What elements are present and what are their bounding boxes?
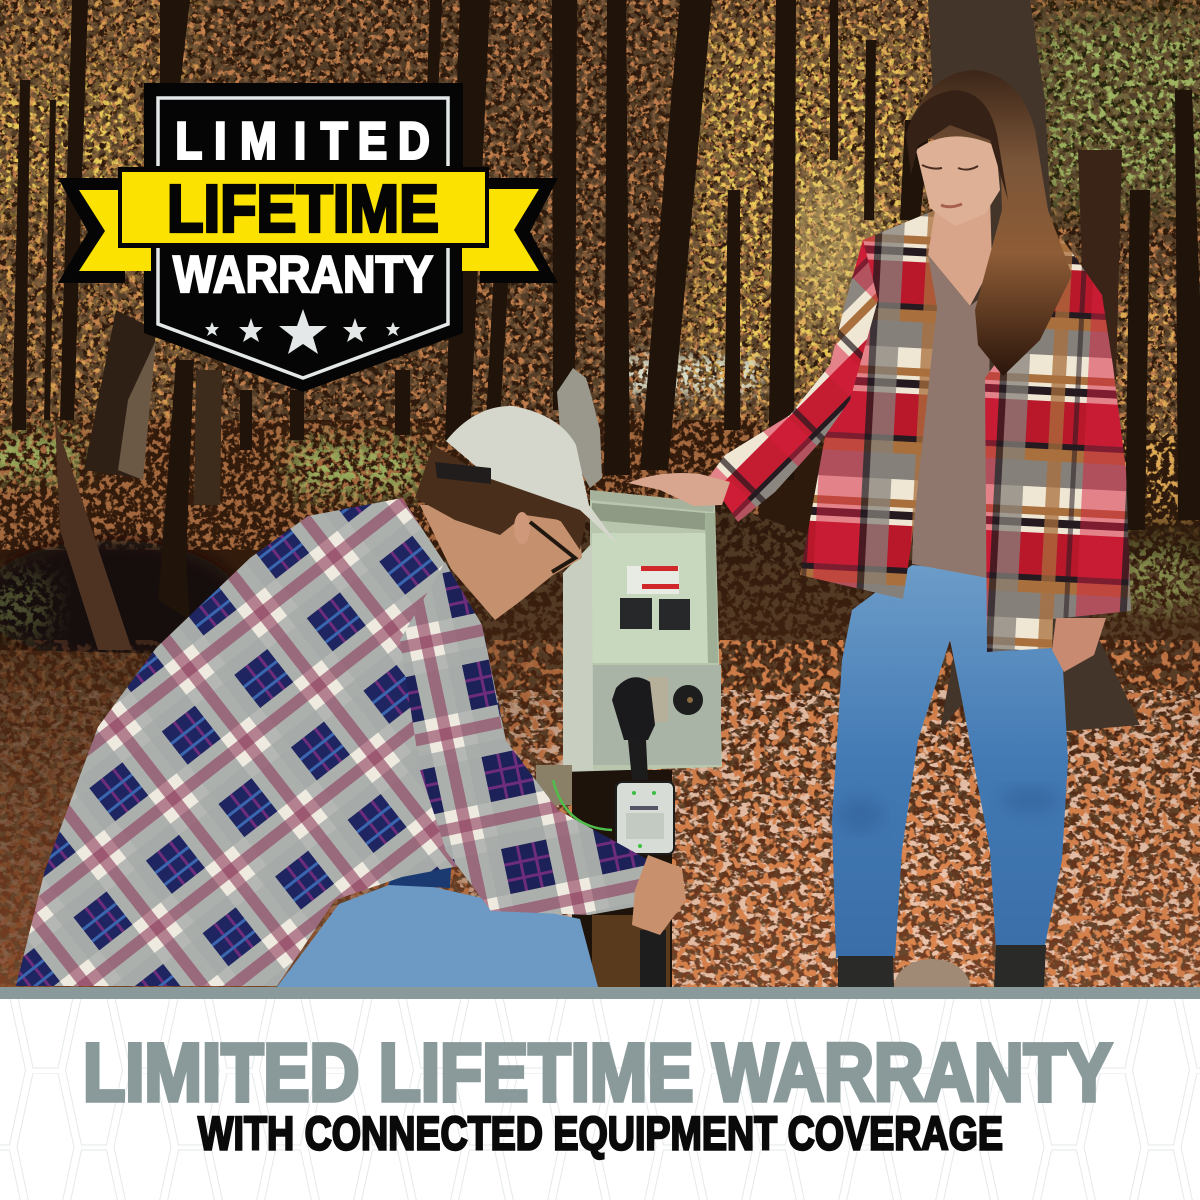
shirt torso — [16, 498, 510, 986]
cap — [446, 406, 618, 545]
dark jeans fold — [388, 820, 452, 888]
large tree behind woman — [928, 0, 1140, 735]
ribbon right tail — [462, 178, 558, 283]
shirt sleeve — [400, 562, 652, 915]
badge text: warranty: WARRANTY — [173, 246, 433, 304]
round outlet — [673, 685, 703, 715]
shield — [144, 83, 463, 392]
electrical panel — [563, 490, 722, 780]
ribbon left tail — [58, 178, 151, 283]
side wall — [563, 545, 593, 772]
shield inner outline — [158, 98, 448, 378]
pale bush — [610, 355, 760, 395]
clamp on post — [536, 765, 572, 805]
cord — [628, 740, 648, 780]
knee shading — [836, 786, 1060, 833]
manhole cover — [894, 959, 970, 1015]
hand — [632, 855, 686, 935]
hair front — [906, 90, 1008, 200]
badge stars — [205, 309, 400, 354]
stone statue — [557, 368, 602, 488]
panel shadow under lid — [592, 503, 705, 530]
badge text: limited: LIMITED — [176, 113, 430, 170]
plaid shirt body right — [985, 240, 1131, 652]
t-shirt — [912, 255, 990, 578]
face — [916, 136, 1000, 226]
ear — [514, 512, 530, 544]
cap strap — [435, 462, 491, 484]
surge protector device — [616, 782, 674, 854]
man — [16, 406, 686, 987]
hand on panel — [628, 473, 730, 506]
glasses — [530, 522, 575, 572]
power plug — [612, 677, 655, 740]
plaid sleeve — [708, 240, 878, 522]
breakers — [620, 598, 690, 630]
leaf litter — [0, 640, 1200, 987]
hair back — [906, 70, 1072, 376]
distant floor and undergrowth — [0, 420, 760, 660]
panel lid — [590, 490, 715, 512]
face features — [922, 165, 978, 207]
tree trunks — [12, 0, 1200, 620]
woman — [628, 70, 1131, 987]
neck — [928, 195, 992, 306]
footer band — [0, 987, 1200, 999]
lit trunks — [55, 310, 222, 650]
right wall — [705, 513, 718, 663]
wooden post base — [592, 915, 670, 987]
hair — [415, 445, 589, 550]
lower power cable — [640, 930, 666, 987]
footer subtitle: WITH CONNECTED EQUIPMENT COVERAGE — [198, 1106, 1003, 1160]
green ground wire — [553, 780, 612, 830]
jeans — [277, 880, 598, 987]
neck and face — [420, 505, 582, 620]
duplex outlet — [648, 677, 668, 722]
lower compartment — [593, 665, 721, 765]
metal post under panel — [572, 770, 672, 987]
ribbon center — [118, 167, 489, 248]
warning label — [627, 566, 679, 594]
footer panel — [0, 987, 1200, 1200]
plaid shirt body left — [800, 210, 937, 599]
warranty badge — [58, 83, 558, 392]
right hand — [1052, 618, 1106, 672]
sunlit gap — [780, 170, 880, 330]
reddish trunk right — [1078, 150, 1122, 380]
leaf ground — [0, 500, 1200, 987]
badge text: lifetime: LIFETIME — [167, 172, 439, 246]
jeans — [832, 565, 1068, 958]
boots — [838, 945, 1046, 987]
panel door — [592, 533, 708, 663]
